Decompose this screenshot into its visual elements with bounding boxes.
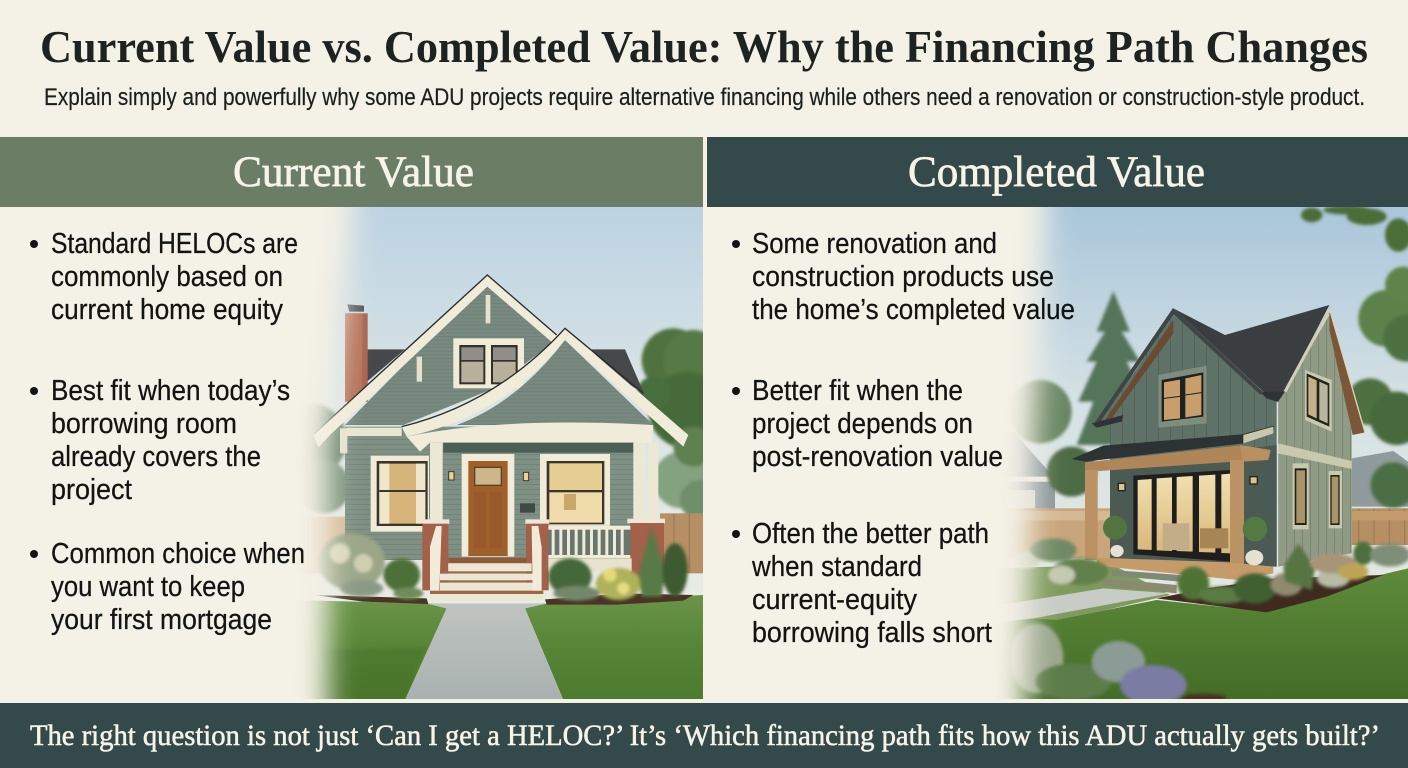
fences [290,513,703,573]
walkway [405,603,563,700]
door [462,454,514,557]
bullets: current value [30,228,305,636]
bullets: completed value: project depends on [752,408,973,440]
bullets: current value: current home equity [51,294,283,326]
columns [423,443,665,524]
front eave [1092,415,1123,428]
path [990,588,1170,623]
lawn [990,568,1408,702]
bullets: completed value: borrowing falls short [752,617,992,649]
mulch beds [313,593,693,605]
title: Current Value vs. Completed Value: Why the Financing Path Changes [40,22,1368,72]
bullets: completed value: Better fit when the [752,375,963,407]
footer banner [0,703,1408,768]
mailbox [520,503,535,513]
porch lamps [449,472,529,481]
dormer window [453,338,524,388]
bullets: current value: your first mortgage [51,604,272,636]
front wall [1102,313,1277,567]
left window [371,456,429,532]
heading bar: current value [0,137,703,207]
bullets: current value: commonly based on [51,261,283,293]
panel: current value [0,137,725,700]
bullets: completed value: construction products use [752,261,1054,293]
porch posts [1085,460,1244,572]
fences [1003,508,1408,558]
front gable [457,340,653,425]
planter topiaries [1103,516,1267,565]
bullets: current value: project [51,474,132,506]
wall lamps [1118,477,1257,491]
bullets: completed value [732,228,1075,649]
side wall lower [1278,453,1352,567]
front gable edge [1097,311,1262,423]
lawn left [306,600,446,699]
heading bar: completed value [707,137,1408,207]
upper side window [1305,370,1332,432]
bullets: current value: Standard HELOCs are [51,228,298,260]
side lower windows [1293,463,1342,529]
footer text: The right question is not just ‘Can I get a HELOC?’ It’s ‘Which financing path fits how this ADU actually gets built?’ [30,720,1380,752]
bullets: completed value: post-renovation value [752,441,1003,473]
main wall [345,427,635,560]
lawn right [525,595,703,700]
bullets: completed value: when standard [751,551,922,583]
heading: completed value: Completed Value [908,149,1205,196]
foreground plants [1010,623,1227,705]
neighbor houses [1016,438,1408,508]
porch wall [443,443,633,453]
sliding door [1133,470,1231,562]
main gable [345,280,557,425]
mulch [1157,575,1383,612]
trees right [308,326,703,514]
wall trim [347,428,402,436]
bullets: current value: Best fit when today’s [51,375,290,407]
upper front window [1158,366,1207,428]
top right leaves [1301,205,1408,252]
right window [540,454,610,527]
side wall upper [1278,315,1352,463]
bullets: completed value: Some renovation and [752,228,997,260]
brick piers [422,523,664,590]
bullets: current value: already covers the [51,441,261,473]
main gable trim [313,275,557,447]
bullets: current value: borrowing room [51,408,237,440]
porch roof [1072,426,1274,462]
house shrubs [1013,538,1408,604]
bullets: completed value: current-equity [752,584,917,616]
back roof [365,349,644,393]
bullets: completed value: Often the better path [752,518,989,550]
bullets: current value: you want to keep [51,571,245,603]
front gable trim [402,328,688,447]
panel: completed value [707,137,1408,705]
front gable soffit [1105,320,1173,420]
garden lawn [1008,566,1170,620]
bullets: current value: Common choice when [51,538,305,570]
lawn shadow [340,648,423,674]
background trees [1008,267,1408,508]
gutter eave [1240,392,1285,403]
heading: current value: Current Value [233,149,474,196]
deck and steps [1097,558,1273,593]
main gable edge [314,275,557,434]
shrubs [318,527,688,601]
brackets [340,295,490,454]
porch lintel [407,423,653,452]
illustration: modern farmhouse ADU [980,205,1408,705]
side trim [1329,308,1365,432]
porch beam [1085,446,1243,472]
porch railing [548,526,632,572]
bullets: completed value: the home’s completed value [752,294,1075,326]
front gable edge [402,328,643,427]
soffit [1329,307,1365,435]
roof main [1173,305,1329,395]
illustration: craftsman bungalow [306,207,703,699]
porch steps [430,526,543,601]
trim band [1278,443,1352,469]
porch recess [1110,445,1277,567]
chimney [345,304,368,402]
side beam [1240,445,1271,462]
